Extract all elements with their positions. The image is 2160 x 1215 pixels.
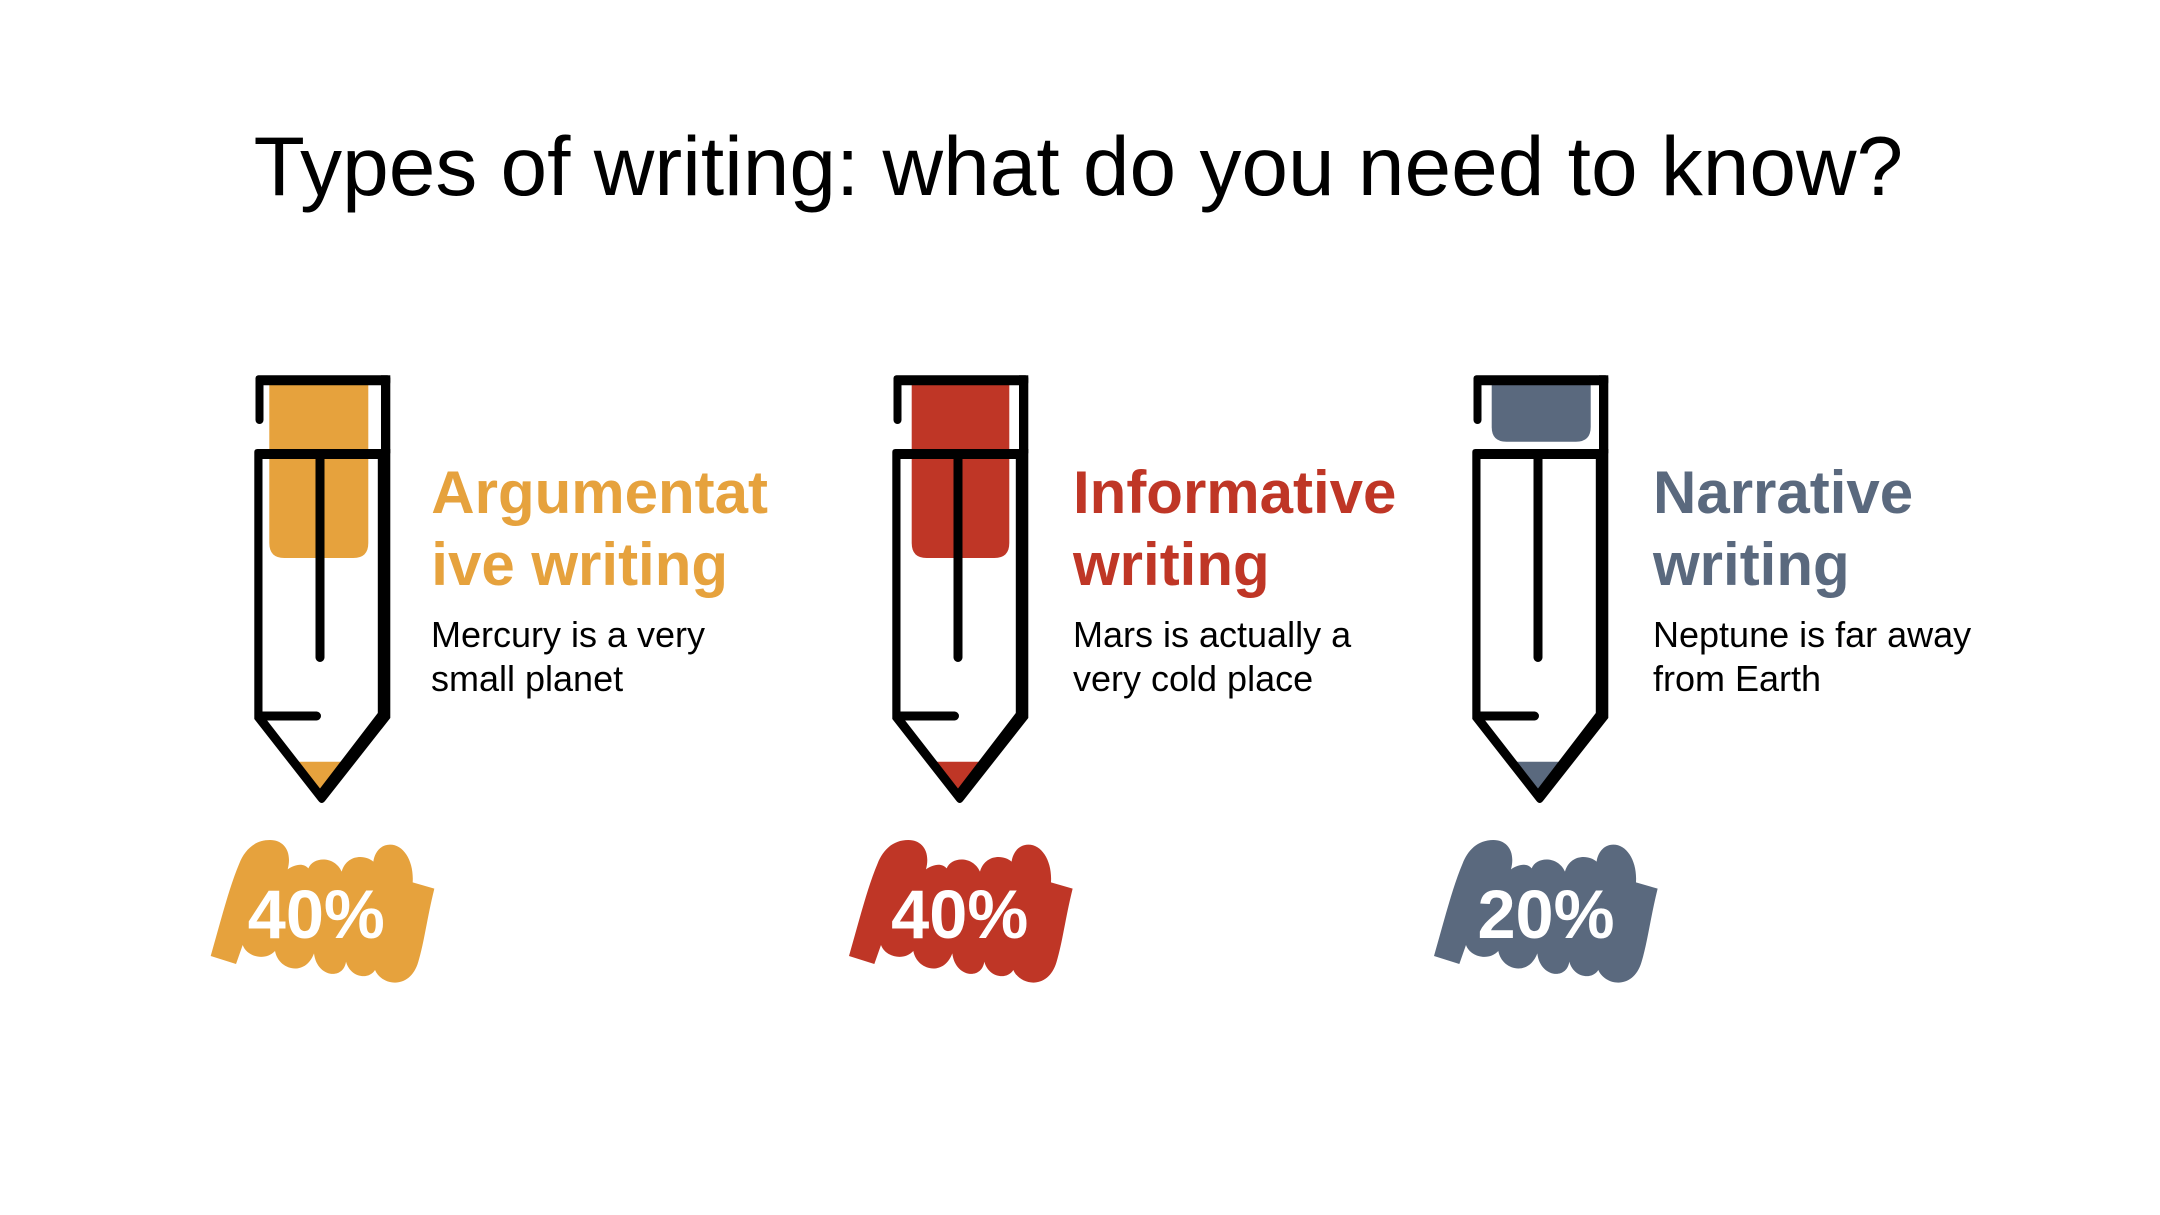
text: mercury [431,614,705,699]
heading: argumentative writing: Argumentat [431,458,768,526]
number: 20% slate: 20% [1477,876,1615,953]
text: mars: Mars is actually a [1073,614,1351,655]
heading: narrative writing: Narrative [1653,458,1913,526]
text: neptune: from Earth [1653,658,1821,699]
heading: informative writing [1072,458,1396,598]
text: mercury: Mercury is a very [431,614,705,655]
number: 40% orange: 40% [248,876,385,953]
badge: orange brush shape [211,840,434,983]
icon: orange pencil [254,375,390,803]
text: mars: very cold place [1073,658,1313,699]
badge: slate brush shape [1434,840,1658,983]
icon: slate pencil [1472,375,1608,803]
heading: informative writing: writing [1073,530,1270,598]
text: mercury: small planet [431,658,623,699]
heading: argumentative writing: ive writing [431,530,728,598]
heading: narrative writing [1652,458,1913,598]
heading: argumentative writing [431,458,768,598]
heading: narrative writing: writing [1653,530,1850,598]
text: mars [1073,614,1352,699]
icon: red pencil [892,375,1028,803]
text: neptune: Neptune is far away [1653,614,1971,655]
text: neptune [1653,614,1971,699]
heading: informative writing: Informative [1073,458,1396,526]
number: 40% red: 40% [891,876,1028,953]
title: Types of writing: what do you need to know? [254,119,1903,213]
badge: red brush shape [849,840,1073,983]
